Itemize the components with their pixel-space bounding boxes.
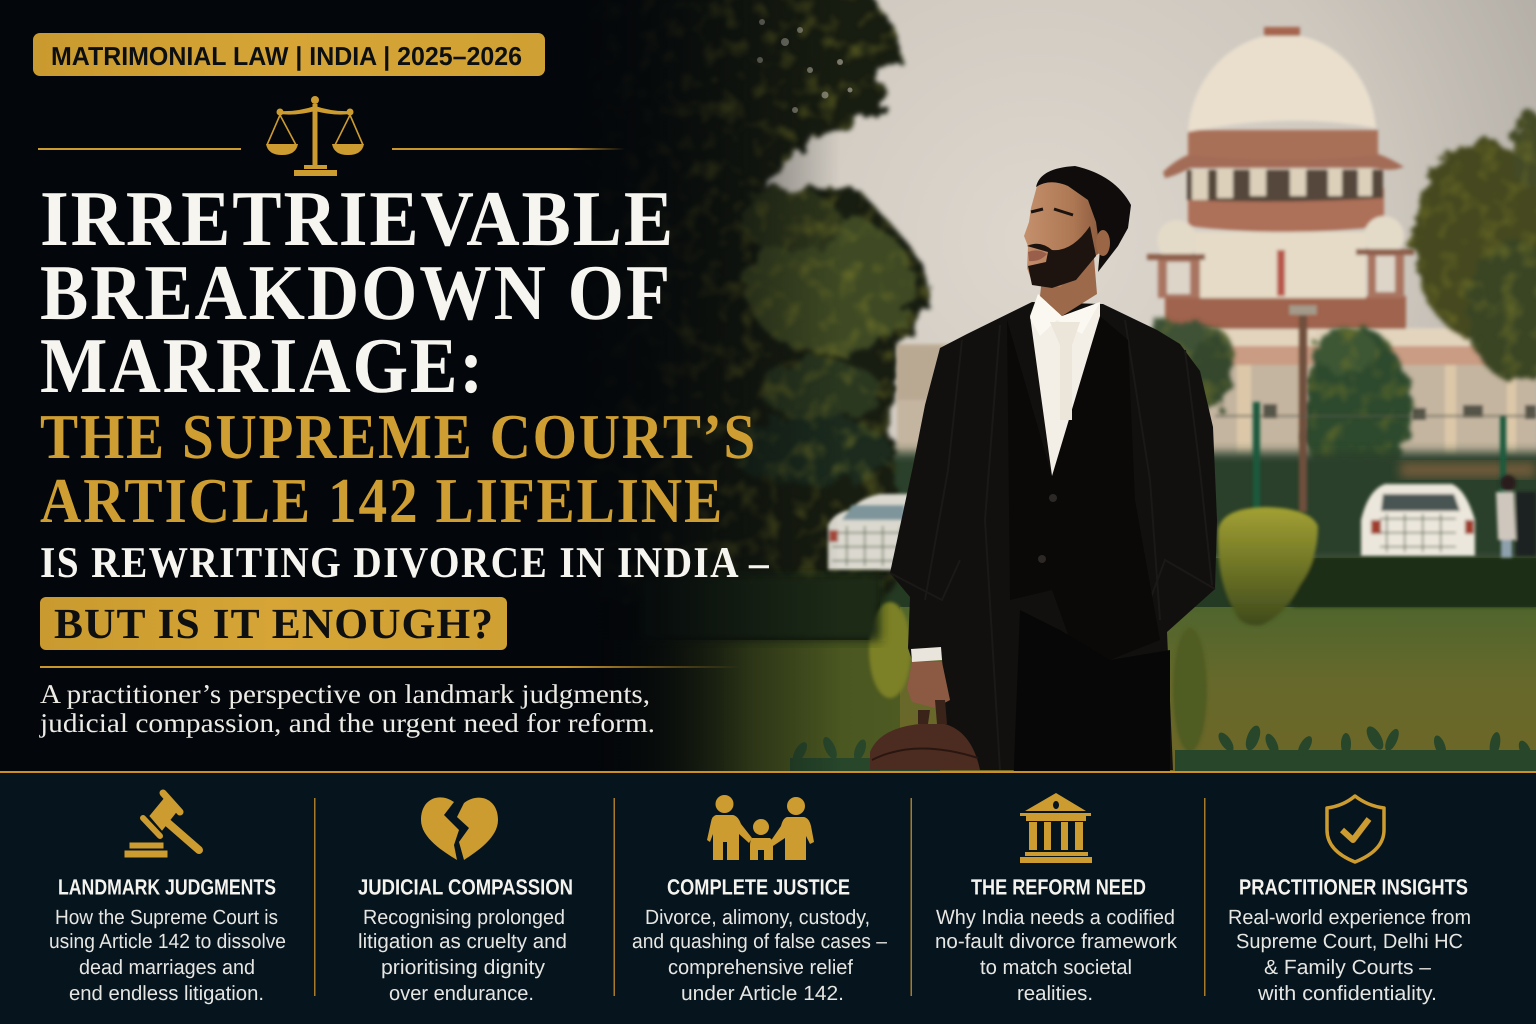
- description: How the Supreme Court is: [55, 906, 278, 929]
- description: [49, 906, 286, 1005]
- dark left overlay: [0, 0, 840, 772]
- description: [1228, 906, 1471, 1005]
- grounds and lawn: [500, 452, 1536, 772]
- icon: scales of justice: [38, 96, 625, 176]
- briefcase: [870, 700, 980, 770]
- description: [358, 906, 567, 1005]
- description: with confidentiality.: [1257, 982, 1437, 1005]
- feature: practitioner insights: [1228, 796, 1471, 1005]
- description: prioritising dignity: [381, 956, 546, 979]
- description: using Article 142 to dissolve: [49, 930, 286, 953]
- icon: courthouse: [1020, 793, 1092, 863]
- face: [1024, 178, 1106, 287]
- hand: [907, 662, 950, 708]
- parked cars: [1361, 475, 1536, 560]
- shirt and collar: [1030, 294, 1100, 476]
- title: white headline: [40, 176, 675, 410]
- title: rewriting line: IS REWRITING DIVORCE IN INDIA –: [40, 538, 770, 587]
- title: gold headline: THE SUPREME COURT’S: [40, 401, 757, 472]
- feature: the reform need: [935, 793, 1178, 1005]
- description: dead marriages and: [79, 956, 255, 979]
- feature: landmark judgments: [49, 793, 286, 1005]
- question pill: BUT IS IT ENOUGH?: [54, 601, 494, 648]
- light building at tree edge: [897, 346, 950, 400]
- feature: complete justice: [632, 795, 888, 1005]
- description: end endless litigation.: [69, 982, 264, 1005]
- gown: [890, 302, 1217, 770]
- foreground leaves: [790, 724, 1536, 772]
- category pill: [33, 33, 545, 76]
- feature: judicial compassion: [358, 797, 573, 1005]
- trees behind building: [1137, 112, 1536, 494]
- supreme court building: [897, 27, 1536, 455]
- description: to match societal: [980, 956, 1132, 979]
- description: Divorce, alimony, custody,: [645, 906, 870, 929]
- feature: complete justice: COMPLETE JUSTICE: [667, 874, 850, 900]
- lamp post and fence: [1215, 305, 1536, 512]
- title: white headline: IRRETRIEVABLE: [40, 176, 675, 263]
- icon: family: [707, 795, 814, 860]
- description: Recognising prolonged: [363, 906, 565, 929]
- description: Real-world experience from: [1228, 906, 1471, 929]
- background scene: [0, 0, 1536, 772]
- hair: [1036, 166, 1131, 272]
- foliage left: [540, 0, 933, 600]
- category pill: MATRIMONIAL LAW | INDIA | 2025–2026: [51, 41, 522, 71]
- beard: [1027, 226, 1096, 288]
- bottom panel: [0, 771, 1536, 1024]
- feature: the reform need: THE REFORM NEED: [971, 874, 1146, 900]
- shirt cuff: [911, 647, 942, 662]
- feature: judicial compassion: JUDICIAL COMPASSION: [358, 874, 573, 900]
- description: litigation as cruelty and: [358, 930, 567, 953]
- description: realities.: [1017, 982, 1093, 1005]
- description: [935, 906, 1178, 1005]
- suit jacket: [1007, 316, 1160, 660]
- lawyer figure: [870, 166, 1217, 790]
- description: Why India needs a codified: [936, 906, 1175, 929]
- description: & Family Courts –: [1264, 956, 1432, 979]
- title: white headline: MARRIAGE:: [40, 323, 485, 410]
- feature: practitioner insights: PRACTITIONER INSIGHTS: [1239, 874, 1468, 900]
- description: [632, 906, 888, 1005]
- hedges and bushes: [869, 507, 1536, 752]
- ear: [1096, 230, 1110, 256]
- eye and brow: [1031, 209, 1073, 215]
- subtitle: [39, 679, 655, 738]
- jacket buttons: [1038, 494, 1057, 563]
- description: and quashing of false cases –: [632, 930, 888, 953]
- description: over endurance.: [389, 982, 534, 1005]
- white tie band: [1050, 322, 1080, 420]
- icon: gavel: [125, 793, 199, 857]
- left car: [828, 494, 910, 570]
- neck: [1040, 258, 1097, 316]
- subtitle: judicial compassion, and the urgent need for reform.: [39, 708, 655, 738]
- lips: [1028, 250, 1047, 261]
- title: gold headline: [40, 401, 757, 536]
- title: white headline: BREAKDOWN OF: [40, 250, 672, 337]
- title: gold headline: ARTICLE 142 LIFELINE: [40, 465, 724, 536]
- description: Supreme Court, Delhi HC: [1236, 930, 1463, 953]
- feature: landmark judgments: LANDMARK JUDGMENTS: [58, 874, 276, 900]
- icon: shield with check: [1327, 796, 1384, 862]
- gown folds: [890, 320, 1215, 770]
- description: comprehensive relief: [668, 956, 853, 979]
- description: under Article 142.: [681, 982, 844, 1005]
- subtitle: A practitioner’s perspective on landmark judgments,: [40, 679, 650, 709]
- description: no-fault divorce framework: [935, 930, 1178, 953]
- icon: broken heart: [421, 797, 498, 860]
- bokeh in canopy: [757, 19, 852, 113]
- hedge left: [640, 575, 880, 641]
